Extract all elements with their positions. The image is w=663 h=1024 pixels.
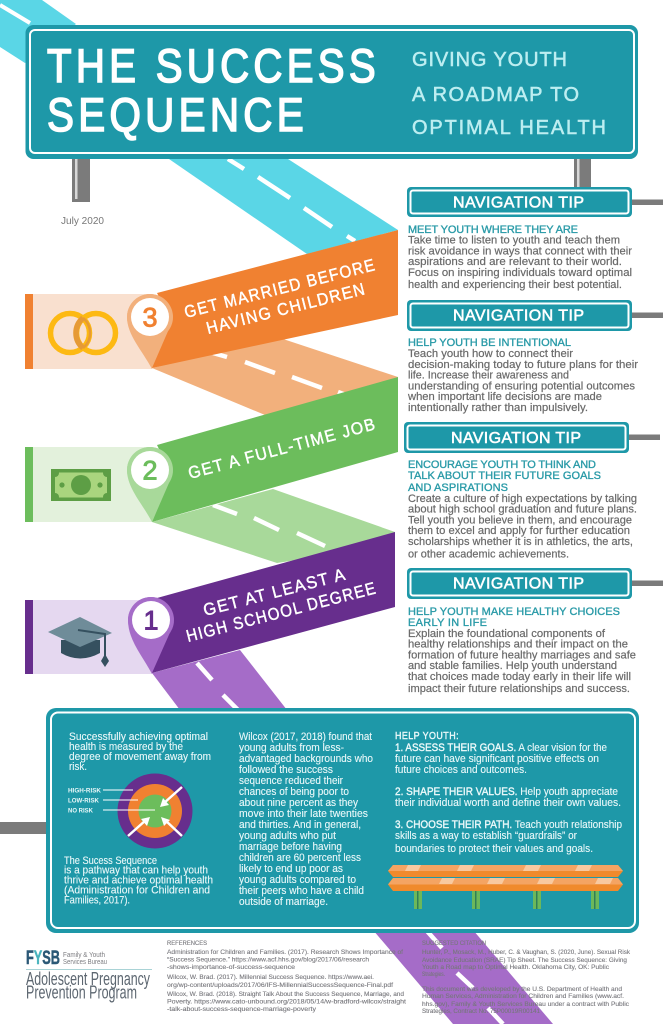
navigation tip 3 [404,422,660,560]
middle column text: marriage before having [239,841,342,853]
number 2: 2 [142,456,158,486]
left column intro: health is measured by the [69,741,183,753]
number 1 [128,597,174,643]
number 3 [127,294,173,340]
tip 2 text: understanding of ensuring potential outcomes [408,380,635,392]
icon: wedding rings [50,314,116,352]
right column: help youth: 2. SHAPE THEIR VALUES. Help youth appreciate [395,786,618,798]
middle column text: Wilcox (2017, 2018) found that [239,731,372,743]
logo: FYSB: Prevention Program [26,982,137,1002]
navigation tip 1: NAVIGATION TIP [453,194,584,212]
number 3: 3 [142,302,158,332]
road: blue top segment [0,0,398,254]
banner 3 [152,230,398,368]
tip 4 text: formation of future healthy marriages and safe [408,650,636,662]
references: org/wp-content/uploads/2017/06/IFS-MillennialSuccessSequence-Final.pdf [167,982,393,989]
suggested citation: This document was developed by the U.S. Department of Health and [422,986,622,993]
references: Wilcox, W. Brad. (2018). Straight Talk About the Success Sequence, Marriage, and [167,991,404,998]
step 1: high school degree [25,532,395,674]
road: purple segment [152,650,287,710]
references: -talk-about-success-sequence-marriage-poverty [167,1006,317,1013]
left column closing text: Families, 2017). [64,894,130,906]
tip 4 text: that choices made today early in their life will [408,671,631,683]
step 3: get married [25,230,398,369]
suggested citation: Strategies, Contract No. 75P00019R00141 [422,1008,540,1015]
middle column text: children are 60 percent less [239,852,361,864]
middle column text: about nine percent as they [239,797,358,809]
references [167,940,406,1013]
number 1: 1 [143,606,159,636]
tip 3 text: AND ASPIRATIONS [408,482,508,494]
tip 3 text: scholarships whether it is in athletics, the arts, [408,536,633,548]
middle column text: likely to end up poor as [239,863,343,875]
tip 1 text: MEET YOUTH WHERE THEY ARE [408,224,578,236]
banner 3: GET MARRIED BEFORE [182,255,378,322]
tip 2 text: life. Increase their awareness and [408,370,569,382]
tip 3 text: Create a culture of high expectations by talking [408,493,637,505]
logo: FYSB: Adolescent Pregnancy [26,969,150,989]
date: July 2020 [61,216,104,227]
navigation tip 3: NAVIGATION TIP [451,430,581,447]
suggested citation: Hunter, P., Mosack, M., Huber, C. & Vaughan, S. (2020, June). Sexual Risk [422,949,631,956]
navigation tip 2 [407,300,663,414]
tip 4 text: healthy relationships and their impact on the [408,638,628,650]
suggested citation: Human Services, Administration for Children and Families (www.acf. [422,993,624,1000]
suggested citation: Avoidance Education (SRAE) Tip Sheet. The Success Sequence: Giving [422,957,627,964]
middle column text: chances of being poor to [239,786,349,798]
title [47,39,380,141]
banner 1: GET AT LEAST A [201,565,348,620]
road: green segment [152,489,395,563]
middle column text [239,731,373,908]
risk target chart [68,774,192,848]
references: -shows-importance-of-success-sequence [167,964,295,971]
sign posts [72,155,591,202]
tip 3 text: ENCOURAGE YOUTH TO THINK AND [408,459,596,471]
banner 2 [152,377,398,522]
navigation tip 1 [407,187,663,291]
pin 1 [128,597,174,674]
tip 2 text: Teach youth how to connect their [408,348,573,360]
banner 3: HAVING CHILDREN [204,279,368,338]
title sign [26,25,638,159]
logo: FYSB [26,948,152,1002]
navigation tip 2: NAVIGATION TIP [453,308,584,324]
road: orange segment [152,337,398,420]
right column: help youth: boundaries to protect their values and goals. [395,843,593,855]
left column intro [69,731,211,773]
references: REFERENCES [167,940,207,947]
icon: graduation cap [48,617,112,667]
step 2: get a job [25,377,398,522]
references: Poverty. https://www.cato-unbound.org/2018/05/14/w-bradford-wilcox/straight [167,998,406,1006]
tip 4 text: EARLY IN LIFE [408,617,487,629]
tip 3 text: or other academic achievements. [408,548,569,560]
suggested citation: Youth a Road map to Optimal Health. Oklahoma City, OK: Public [422,964,610,971]
banner 1: HIGH SCHOOL DEGREE [184,578,379,646]
subtitle: A ROADMAP TO [412,84,579,106]
tip 4 text: and stable families. Help youth understand [408,660,617,672]
middle column text: advantaged backgrounds who [239,753,373,765]
middle column text: move into their late twenties [239,808,368,820]
tip 4 text: Explain the foundational components of [408,628,606,640]
suggested citation: Strategies. [422,971,445,978]
risk target chart: LOW-RISK [68,798,99,804]
right column: help youth: their individual worth and define their own values. [395,797,621,809]
middle column text: outside of marriage. [239,896,328,908]
right column: help youth: HELP YOUTH: [395,731,459,742]
tip 2 text: decision-making today to future plans for their [408,359,638,371]
road: purple bottom segment [373,930,553,1024]
references: “Success Sequence.” https://www.acf.hhs.gov/blog/2017/06/research [167,956,369,964]
pin 3 [127,294,173,369]
middle column text: and thirties. And in general, [239,819,361,831]
left column closing text: is a pathway that can help youth [64,864,208,876]
tip 2 text: when important life decisions are made [407,391,602,403]
middle column text: followed the success [239,764,333,776]
tip 4 text: HELP YOUTH MAKE HEALTHY CHOICES [408,606,620,618]
tip 2 text [407,337,638,414]
suggested citation [422,940,631,1015]
navigation tip 4: NAVIGATION TIP [453,576,584,592]
suggested citation: hhs.gov), Family & Youth Services Bureau under a contract with Public [422,1001,630,1008]
navigation tip 4 [407,568,663,695]
banner 1 [152,532,395,673]
suggested citation: SUGGESTED CITATION [422,940,486,947]
middle column text: their peers who have a child [239,885,364,897]
tip 1 text: health and experiencing their best potential. [408,279,622,291]
middle column text: sequence reduced their [239,775,343,787]
post stub left of panel [0,822,48,834]
title: THE SUCCESS [47,39,380,92]
tip 1 text: aspirations and are relevant to their world. [408,256,622,268]
references: Administration for Children and Families. (2017). Research Shows Importance of [167,949,403,956]
banner 2: GET A FULL-TIME JOB [186,414,378,483]
logo: FYSB: FYSB [26,948,60,969]
references: Wilcox, W. Brad. (2017). Millennial Success Sequence. https://www.aei. [167,974,374,981]
risk target chart: NO RISK [68,808,93,814]
panel: bottom information sign [46,708,639,933]
tip 3 text: Tell youth you believe in them, and encourage [408,514,632,526]
middle column text: young adults compared to [239,874,356,886]
number 2 [127,447,173,493]
tip 2 text: intentionally rather than impulsively. [408,402,588,414]
subtitle [412,49,606,139]
middle column text: young adults who put [239,830,336,842]
right column: help youth: future can have significant positive effects on [395,753,599,765]
left column intro: degree of movement away from [69,751,211,763]
logo: FYSB: Family & Youth [63,950,105,959]
left column intro: risk. [69,761,87,773]
tip 3 text: about high school graduation and future plans. [408,504,637,516]
icon: guardrail [388,865,623,909]
logo: FYSB: Services Bureau [63,957,107,966]
left column intro: Successfully achieving optimal [69,731,208,743]
tip 1 text [408,224,632,291]
tip 4 text: impact their future relationships and success. [408,683,630,695]
tip 1 text: Focus on inspiring individuals toward optimal [408,267,632,279]
tip 3 text [408,459,637,560]
right column: help youth: skills as a way to establish “guardrails” or [395,830,577,842]
tip 4 text [408,606,636,695]
left column closing text: The Sucess Sequence [64,855,157,867]
tip 3 text: them to excel and apply for further education [408,525,630,537]
title: SEQUENCE [47,88,308,141]
tip 1 text: Take time to listen to youth and teach them [408,234,620,246]
right column: help youth: 1. ASSESS THEIR GOALS. A clear vision for the [395,742,607,754]
right column: help youth: future choices and outcomes. [395,764,527,776]
tip 3 text: TALK ABOUT THEIR FUTURE GOALS [408,470,601,482]
right column: help youth: 3. CHOOSE THEIR PATH. Teach youth relationship [395,819,622,831]
tip 2 text: HELP YOUTH BE INTENTIONAL [408,337,571,349]
right column: help youth [395,731,622,855]
left column closing text: thrive and achieve optimal health [64,874,213,886]
risk target chart: HIGH-RISK [68,788,101,794]
left column closing text: (Administration for Children and [64,884,210,896]
pin 2 [127,447,173,522]
tip 1 text: risk avoidance in ways that connect with their [408,246,632,258]
icon: money [51,469,111,501]
subtitle: OPTIMAL HEALTH [412,117,606,139]
left column closing text [64,855,213,906]
middle column text: young adults from less- [239,742,344,754]
subtitle: GIVING YOUTH [412,49,567,71]
